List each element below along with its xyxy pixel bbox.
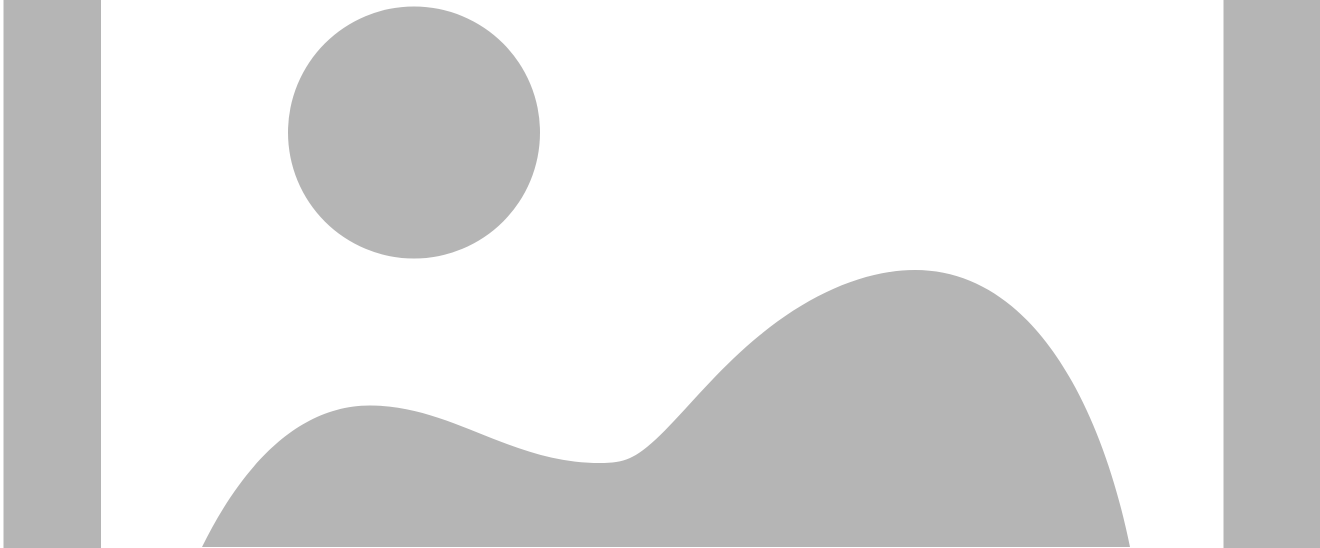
left side bar [4, 0, 101, 548]
right side bar [1224, 0, 1320, 548]
icon: hills [202, 270, 1130, 547]
icon: sun circle [288, 6, 540, 258]
